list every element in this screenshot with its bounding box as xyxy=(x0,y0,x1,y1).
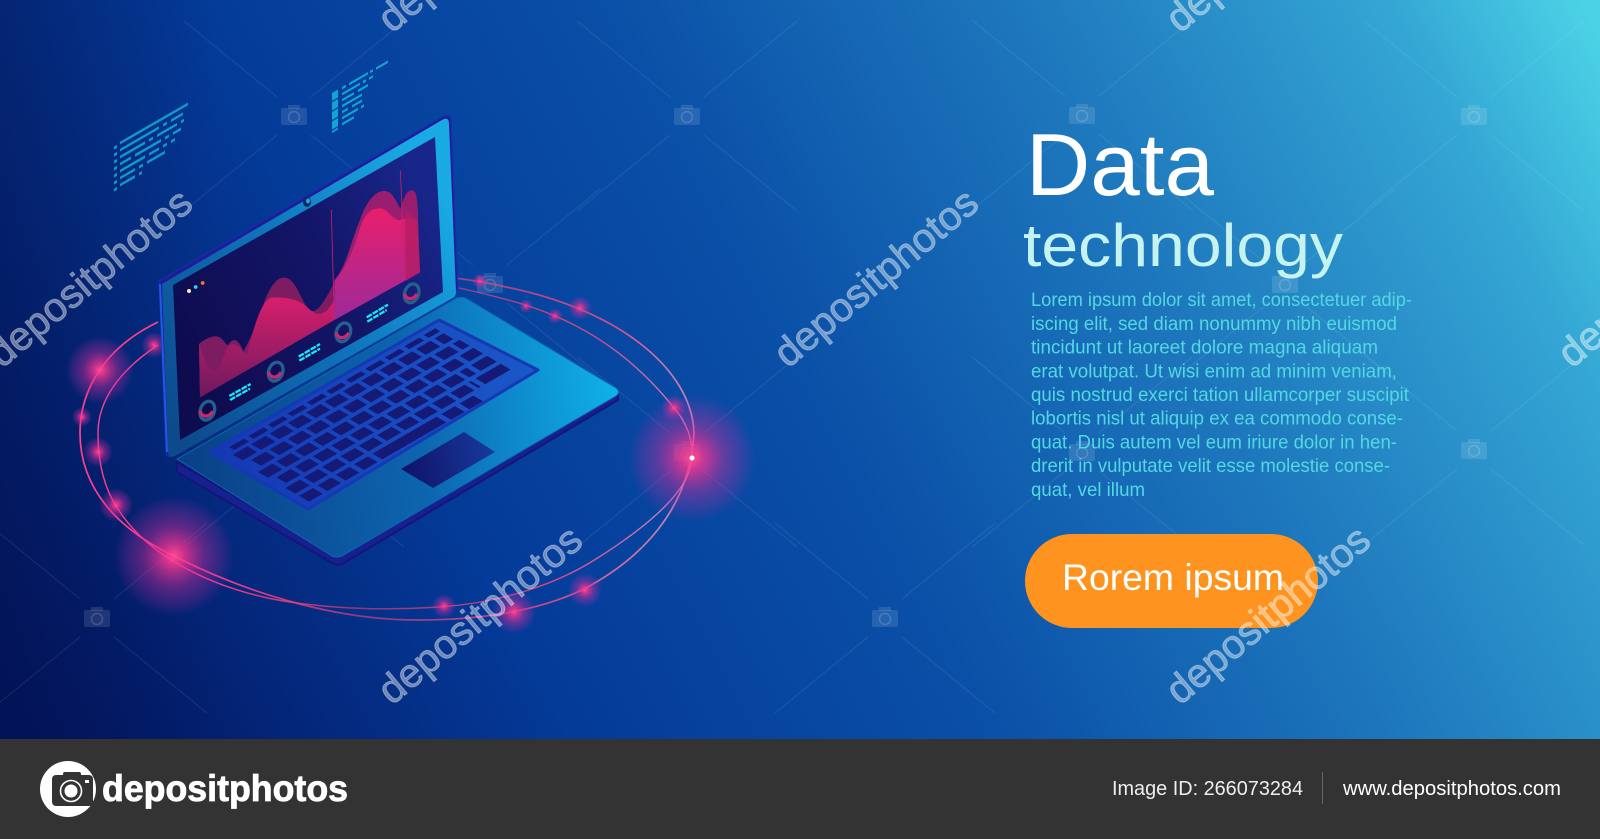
laptop lid xyxy=(159,116,458,457)
orbit ring rear xyxy=(80,278,694,620)
title: Data: Data xyxy=(1026,115,1214,214)
screen area chart xyxy=(187,171,422,422)
watermark over button: depositphotos xyxy=(1158,517,1379,713)
site url: www.depositphotos.com xyxy=(1342,778,1561,800)
body paragraph: tincidunt ut laoreet dolore magna aliquam xyxy=(1031,336,1378,358)
body paragraph: Lorem ipsum dolor sit amet, consectetuer adip- xyxy=(1031,289,1412,311)
body paragraph: quat. Duis autem vel eum iriure dolor in hen- xyxy=(1031,432,1397,454)
body paragraph: drerit in vulputate velit esse molestie conse- xyxy=(1031,455,1390,477)
floating code block right xyxy=(335,61,388,131)
laptop xyxy=(159,116,618,565)
body paragraph: erat volutpat. Ut wisi enim ad minim veniam, xyxy=(1031,360,1397,382)
body paragraph: lobortis nisl ut aliquip ex ea commodo conse- xyxy=(1031,408,1403,430)
body paragraph xyxy=(1031,289,1412,501)
subtitle: technology: technology xyxy=(1023,212,1343,279)
screen donut gauges xyxy=(197,282,422,422)
laptop deck xyxy=(177,297,618,557)
body paragraph: iscing elit, sed diam nonummy nibh euismod xyxy=(1031,313,1397,335)
image id: Image ID: 266073284 xyxy=(1112,778,1303,800)
footer logo: depositphotos xyxy=(102,768,348,809)
touchpad xyxy=(401,432,495,488)
body paragraph: quat, vel illum xyxy=(1031,479,1145,501)
footer bar xyxy=(0,739,1600,839)
laptop base underside xyxy=(177,394,618,565)
footer logo xyxy=(40,761,348,817)
floating code block left xyxy=(116,104,188,191)
screen xyxy=(173,137,443,440)
lid left edge highlight xyxy=(160,284,167,452)
keyboard xyxy=(210,320,538,509)
button: Rorem ipsum xyxy=(1062,557,1284,598)
watermark text: depositphotos xyxy=(370,517,591,713)
webcam xyxy=(303,197,311,207)
glowing nodes xyxy=(66,273,756,634)
watermark text: depositphotos xyxy=(766,180,987,376)
body paragraph: quis nostrud exerci tation ullamcorper suscipit xyxy=(1031,384,1410,406)
screen dots xyxy=(187,281,204,293)
screen legend labels xyxy=(229,305,388,400)
button xyxy=(1025,534,1318,628)
